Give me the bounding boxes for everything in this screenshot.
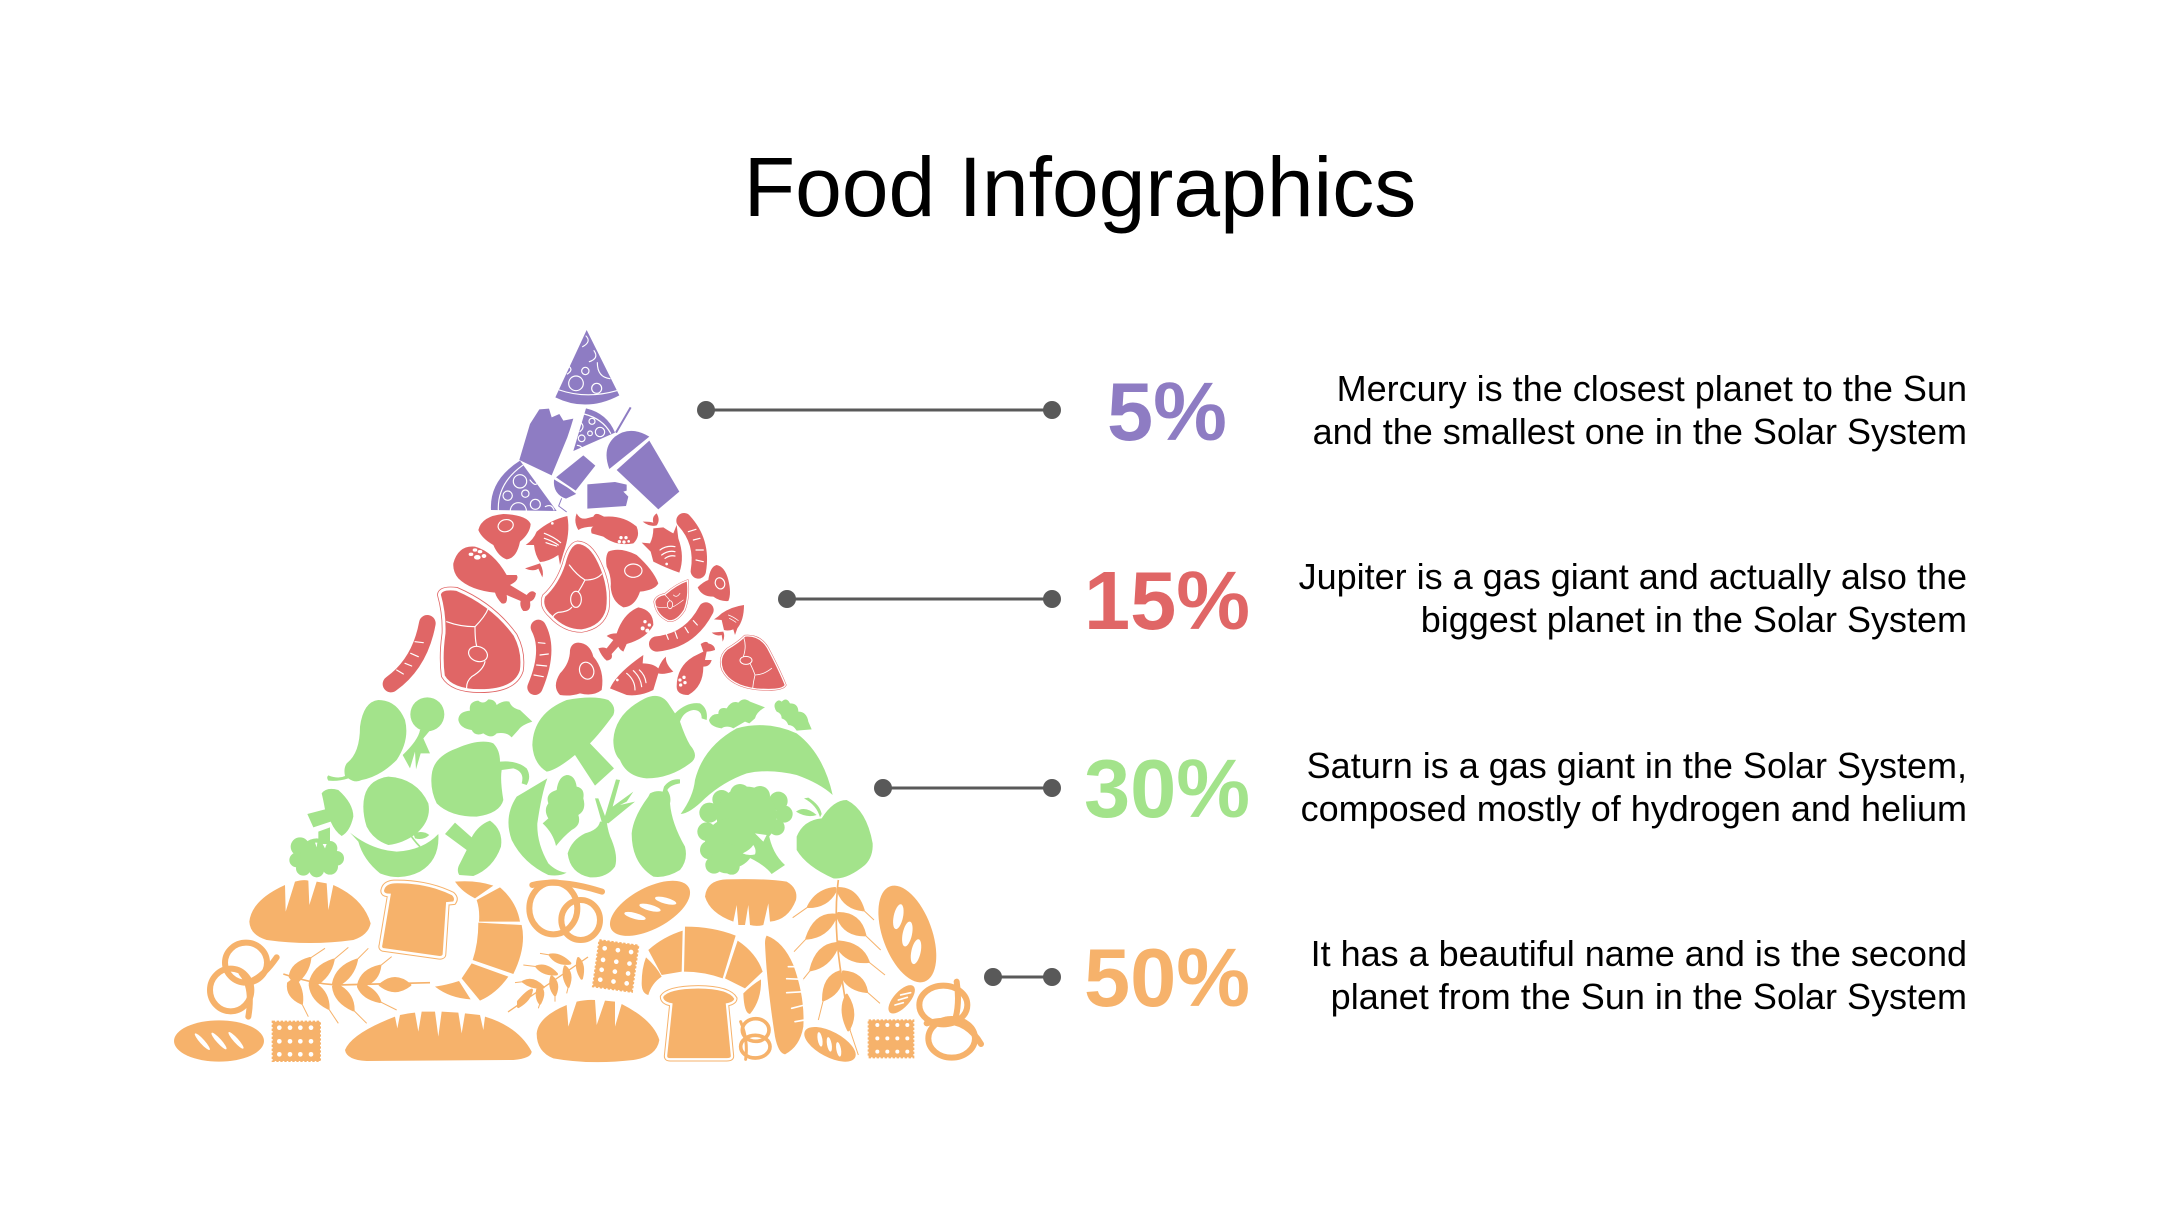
- icon: small pizza slice: [573, 408, 615, 451]
- icon: bottom pizza slice: [491, 461, 557, 519]
- connector: 50%: [984, 968, 1061, 986]
- icon: sausage left: [391, 623, 427, 684]
- text block: Saturn: composed mostly of hydrogen and helium: [1301, 788, 1967, 829]
- text block: second planet: planet from the Sun in the Solar System: [1331, 976, 1967, 1017]
- icon: fish bottom: [610, 655, 673, 695]
- icon: oak leaf: [543, 775, 584, 846]
- icon: cracker tilted: [593, 940, 638, 992]
- pyramid tier: vegetables (green): [289, 696, 873, 878]
- icon: wheat vertical: [793, 880, 885, 1055]
- icon: pretzel 3: [919, 982, 981, 1058]
- icon: fish 3: [642, 513, 682, 573]
- icon: large mushroom: [532, 697, 614, 786]
- icon: bell pepper centre: [431, 742, 529, 817]
- icon: fish 2: [575, 513, 638, 544]
- icon: sausage top right: [684, 521, 703, 571]
- icon: cucumber: [327, 700, 406, 781]
- text block: Jupiter: biggest planet in the Solar System: [1421, 599, 1967, 640]
- pyramid tier: bread (orange): [174, 869, 981, 1069]
- icon: small ham steak: [655, 581, 688, 621]
- icon: loaf top left: [249, 880, 371, 943]
- icon: drumstick bottom: [677, 642, 715, 695]
- icon: small steak right: [698, 565, 730, 601]
- text block: Jupiter: Jupiter is a gas giant and actually also the: [1299, 556, 1967, 597]
- icon: small fish: [712, 605, 744, 642]
- icon: onion: [568, 779, 635, 877]
- pyramid tier: meat (red): [391, 513, 785, 696]
- icon: cracker 3: [869, 1020, 913, 1057]
- icon: cup with straw: [607, 407, 679, 509]
- icon: centre right steak: [606, 550, 658, 607]
- icon: leaf 2: [709, 699, 765, 728]
- icon: radish: [403, 697, 444, 769]
- icon: small pretzel: [741, 1019, 770, 1059]
- icon: steak bottom middle: [556, 643, 602, 696]
- connector: 15%: [778, 590, 1061, 608]
- icon: eggplant: [632, 779, 686, 877]
- icon: green bean: [508, 778, 567, 875]
- text block: Mercury: Mercury is the closest planet to the Sun: [1337, 368, 1967, 409]
- icon: centre ham steak: [543, 543, 608, 631]
- icon: round loaf bottom: [537, 1000, 659, 1062]
- icon: croissant 1: [435, 881, 523, 1001]
- text block: second planet: [1311, 933, 1967, 1017]
- icon: leaf 3: [774, 700, 812, 731]
- icon: drumstick medium: [598, 607, 653, 661]
- percentage: 15%: 15%: [1084, 554, 1250, 647]
- icon: pretzel 1: [529, 882, 602, 940]
- percentage: 5%: 5%: [1107, 365, 1227, 458]
- icon: oval bun bottom left: [174, 1020, 264, 1062]
- icon: cracker 1: [273, 1022, 320, 1061]
- title: Food Infographics: [744, 140, 1416, 234]
- icon: pea pod: [350, 832, 438, 877]
- icon: small oval bun: [799, 1020, 861, 1069]
- icon: apple left: [363, 777, 429, 845]
- icon: small mushroom left: [307, 789, 353, 836]
- icon: small cup: [554, 455, 595, 512]
- icon: baguette: [765, 936, 805, 1054]
- text block: Jupiter: [1299, 556, 1967, 640]
- icon: long bun tilted: [867, 878, 948, 990]
- text block: Saturn: [1301, 745, 1967, 829]
- icon: sausage middle: [534, 627, 548, 687]
- icon: half loaf: [705, 879, 796, 926]
- icon: large ham steak: [439, 589, 522, 691]
- icon: apple right: [796, 798, 873, 878]
- percentage: 50%: 50%: [1084, 931, 1250, 1024]
- text block: Mercury: [1313, 368, 1967, 452]
- icon: mushroom lower: [445, 821, 501, 876]
- text block: Mercury: and the smallest one in the Solar System: [1313, 411, 1967, 452]
- icon: top pizza slice: [555, 330, 619, 405]
- connector: 5%: [697, 401, 1061, 419]
- connector: 30%: [874, 779, 1061, 797]
- icon: toast slice 1: [381, 882, 455, 957]
- panel: food pyramid: [174, 330, 981, 1069]
- icon: croissant 2: [642, 927, 763, 1014]
- icon: large fries: [519, 409, 573, 475]
- icon: long loaf: [345, 1012, 532, 1061]
- text block: second planet: It has a beautiful name and is the second: [1311, 933, 1967, 974]
- icon: bell pepper right: [613, 696, 707, 778]
- icon: leaf 1: [458, 699, 532, 737]
- pyramid tier: fast food (purple): [491, 330, 679, 519]
- icon: small fries: [587, 482, 628, 509]
- icon: broccoli: [697, 784, 793, 875]
- icon: tiny bun: [884, 981, 919, 1018]
- text block: Saturn: Saturn is a gas giant in the Solar System,: [1307, 745, 1967, 786]
- icon: ham steak right: [721, 636, 785, 689]
- icon: oval bun tilted: [601, 869, 699, 947]
- icon: pretzel 2: [210, 943, 277, 1017]
- icon: wheat horizontal: [283, 947, 430, 1023]
- icon: wheat small: [508, 953, 588, 1012]
- percentage: 30%: 30%: [1084, 742, 1250, 835]
- icon: sausage horizontal: [657, 610, 706, 644]
- icon: small broccoli: [289, 827, 344, 877]
- icon: toast slice 2: [662, 987, 735, 1059]
- icon: drumstick large: [453, 547, 536, 611]
- icon: fish 1: [525, 516, 568, 577]
- icon: large chilli: [681, 725, 833, 814]
- icon: steak top left: [478, 514, 531, 559]
